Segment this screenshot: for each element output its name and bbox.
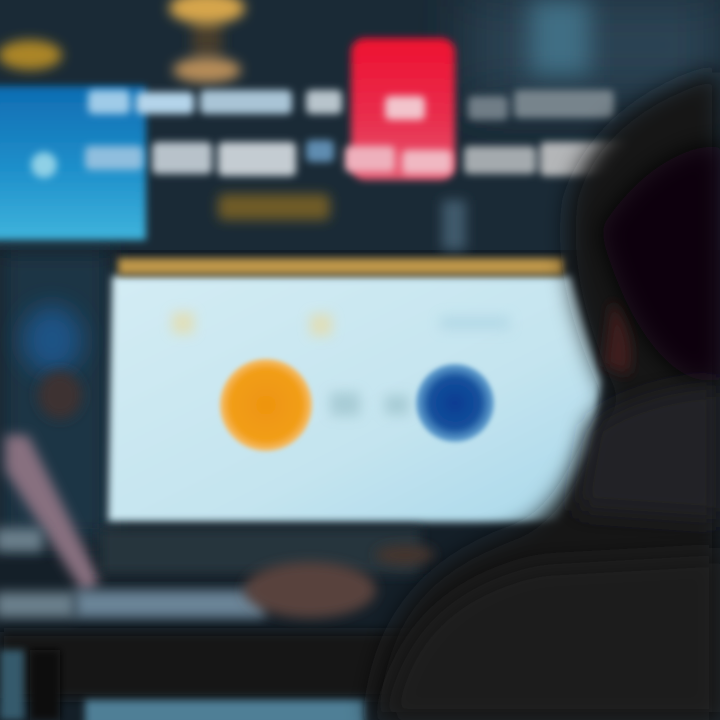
red panel — [351, 38, 455, 180]
orange circle — [220, 359, 312, 451]
monitor — [108, 258, 602, 522]
blue panel — [0, 86, 146, 240]
top orange bar — [118, 258, 564, 275]
blurred headline lines — [31, 90, 630, 178]
foreground person silhouette — [370, 70, 720, 720]
hand — [244, 545, 435, 618]
ceiling lights — [0, 0, 245, 83]
keyboard and desk — [0, 528, 420, 720]
screen — [108, 276, 602, 522]
faint screen labels — [172, 312, 510, 416]
blue circle — [416, 364, 494, 442]
left person — [0, 306, 100, 618]
gold subtitle — [218, 194, 466, 250]
